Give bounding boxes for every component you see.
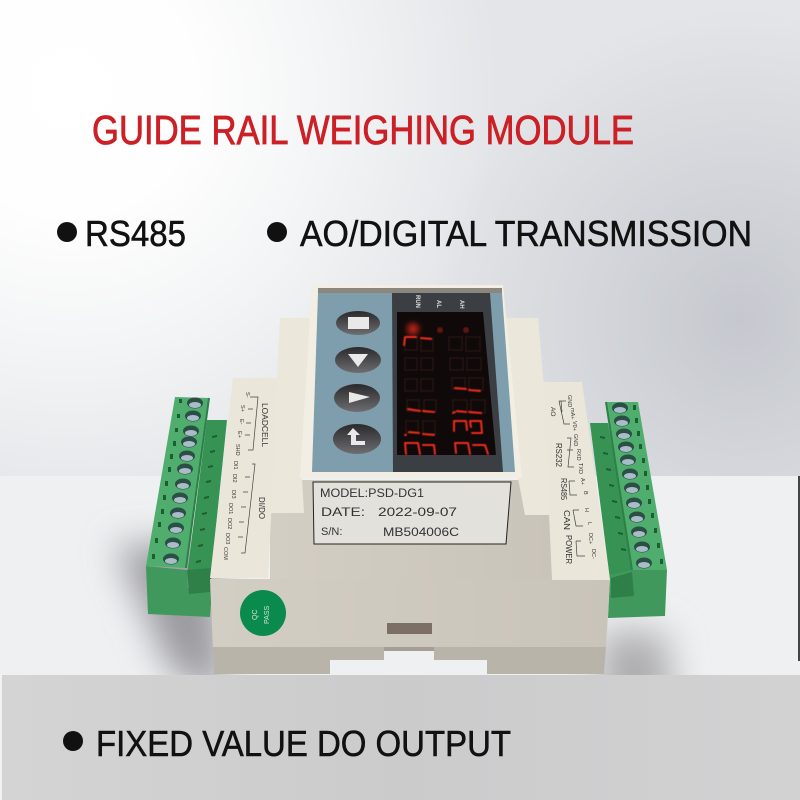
right green terminal block	[590, 402, 667, 618]
model label: MB504006C	[383, 527, 459, 539]
left connector label strip: DO1	[227, 503, 233, 514]
left connector label strip: DI2	[231, 474, 237, 483]
right connector label strip: GND	[572, 434, 578, 446]
left cream rail	[270, 318, 312, 513]
DI/DO group label: DI/DO	[257, 497, 266, 519]
display window	[397, 312, 496, 455]
left connector label strip: SHD	[234, 444, 240, 456]
QC pass sticker	[240, 590, 286, 636]
right connector label strip: A+	[579, 478, 585, 485]
left connector label strip: E-	[238, 419, 244, 425]
left connector label strip: DI1	[232, 461, 238, 470]
button: enter	[333, 424, 381, 454]
right connector label strip: B	[582, 491, 588, 495]
title: GUIDE RAIL WEIGHING MODULE	[92, 107, 634, 153]
model label: 2022-09-07	[378, 505, 457, 519]
LOADCELL group label: LOADCELL	[260, 403, 269, 448]
feature: fixed value DO output: FIXED VALUE DO OUTPUT	[96, 723, 511, 764]
QC pass sticker: PASS	[264, 606, 271, 624]
right connector label strip: V0+	[571, 421, 577, 431]
front panel	[300, 285, 522, 478]
right connector label strip	[543, 382, 610, 580]
right connector label strip: RS485	[559, 478, 568, 500]
indicator labels	[414, 295, 464, 309]
left connector label strip: E+	[236, 431, 242, 438]
right connector label strip: H	[583, 508, 589, 512]
model label: S/N:	[321, 526, 342, 538]
right connector label strip: CAN	[562, 510, 571, 530]
right connector label strip: DC-	[590, 549, 596, 559]
model label: MODEL:PSD-DG1	[320, 486, 424, 500]
indicator labels: AL	[435, 300, 441, 308]
left connector label strip: DO3	[224, 533, 230, 544]
seven-segment readout	[404, 337, 488, 454]
left connector label strip: S+	[239, 405, 245, 412]
right connector label strip: RS232	[554, 443, 563, 468]
right connector label strip: TXD	[577, 463, 583, 474]
left connector label strip: COM	[222, 547, 228, 560]
indicator labels: AH	[458, 300, 464, 309]
indicator labels: RUN	[414, 295, 420, 308]
indicator LEDs	[407, 323, 469, 335]
right connector label strip: POWER	[564, 535, 573, 564]
left green terminal block	[146, 397, 227, 617]
right connector label strip: RXD	[575, 449, 581, 461]
left connector label strip: DI3	[230, 490, 236, 499]
right connector label strip: DC+	[587, 533, 593, 544]
latch slot	[387, 623, 432, 634]
button: stop	[336, 311, 380, 335]
left connector label strip: DO2	[226, 518, 232, 529]
feature: AO/digital transmission: AO/DIGITAL TRANSMISSION	[300, 213, 752, 254]
feature: RS485: RS485	[85, 213, 186, 254]
QC pass sticker: QC	[252, 610, 259, 620]
left connector label strip	[210, 378, 278, 578]
display housing	[392, 293, 503, 472]
button: right	[334, 384, 380, 412]
device body	[210, 480, 610, 674]
button: down	[335, 347, 381, 373]
right connector label strip: L	[586, 522, 592, 525]
right cream rail	[505, 318, 555, 515]
right connector label strip: mA+	[569, 408, 575, 419]
model label: DATE:	[321, 505, 365, 519]
right connector label strip: AO	[549, 407, 556, 416]
model label	[313, 482, 511, 544]
left connector label strip: S-	[244, 392, 250, 398]
right connector label strip: GND	[566, 395, 572, 407]
